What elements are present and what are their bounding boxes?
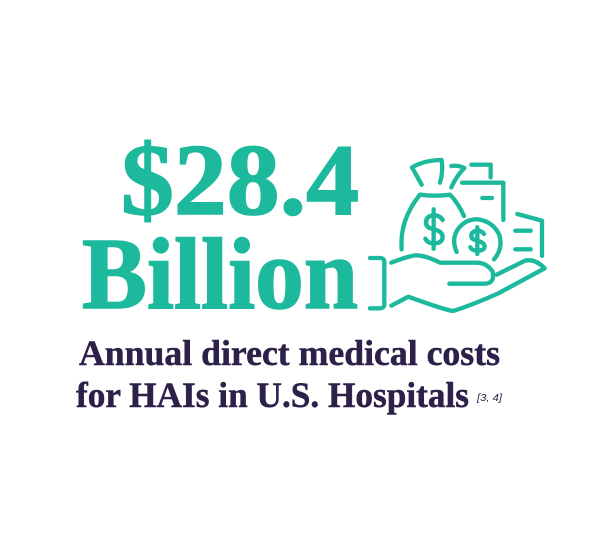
headline figure: $28.4 [121, 124, 359, 237]
headline unit: Billion [82, 218, 358, 331]
icon: bills [462, 165, 542, 256]
icon: money bag [401, 160, 464, 249]
icon: hand [391, 255, 545, 311]
subtitle [76, 333, 502, 415]
icon: coin [454, 219, 501, 259]
icon: hand holding money bag, coin and bills [370, 160, 545, 311]
subtitle line 1: Annual direct medical costs [79, 333, 500, 373]
citation: [3, 4] [476, 393, 502, 404]
subtitle line 2: for HAIs in U.S. Hospitals [76, 375, 469, 415]
icon: cuff [370, 258, 384, 308]
